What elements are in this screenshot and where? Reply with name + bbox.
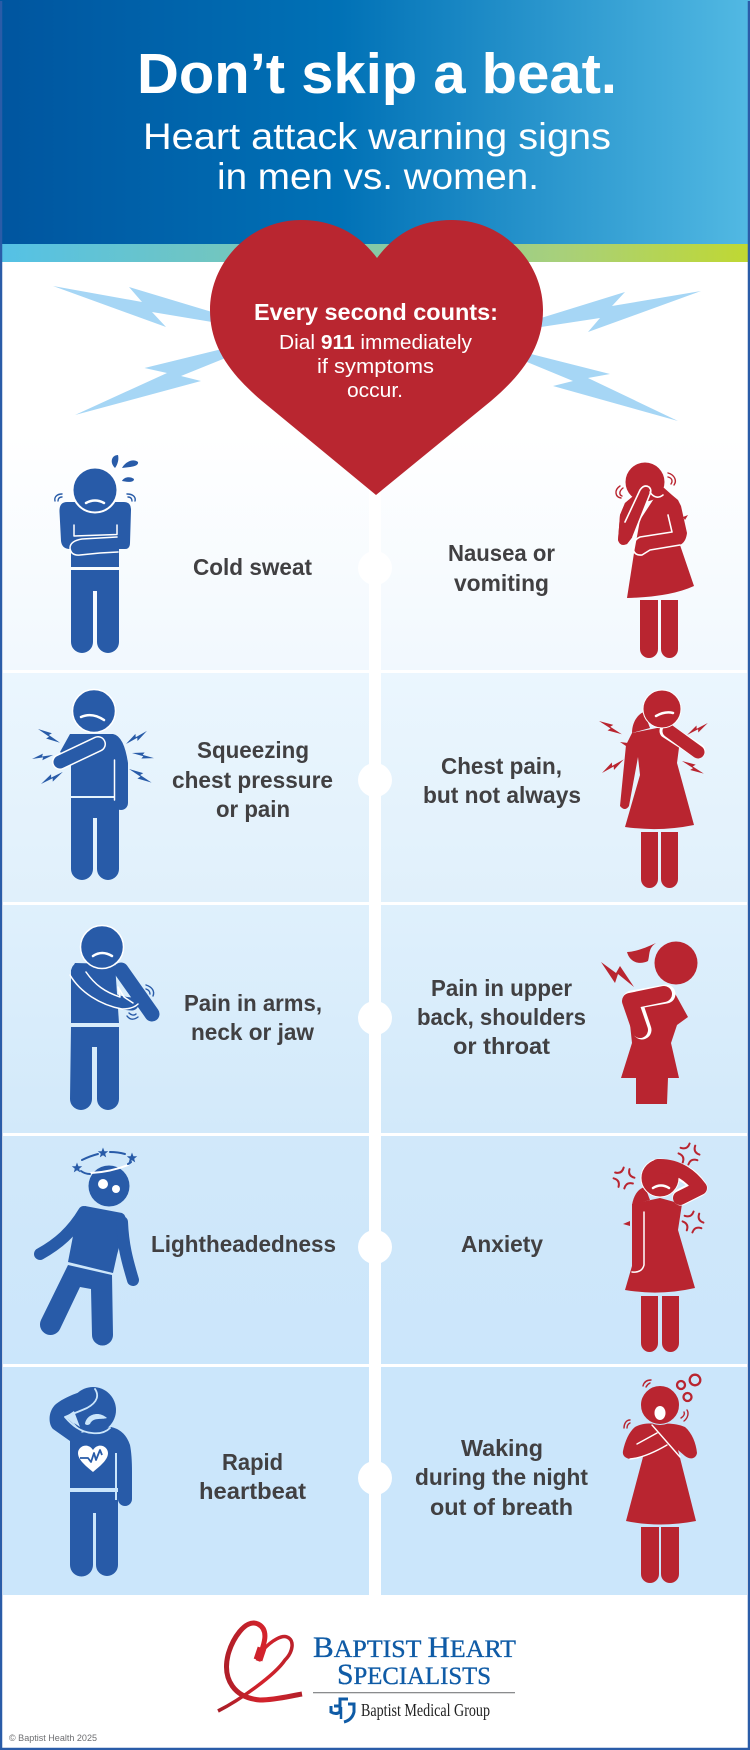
- label: cold sweat: Cold sweat: [193, 554, 312, 580]
- label: anxiety: Anxiety: [461, 1231, 543, 1257]
- label: nausea or vomiting: Nausea or: [448, 540, 555, 566]
- logo cross icon: [331, 1699, 354, 1722]
- logo wordmark: [313, 1631, 516, 1691]
- label: waking out of breath: Waking: [461, 1435, 543, 1461]
- label: upper back: or throat: [453, 1033, 550, 1059]
- label: squeezing chest pressure: or pain: [216, 796, 290, 822]
- label: waking out of breath: [415, 1435, 588, 1520]
- logo wordmark: BAPTIST HEART: [313, 1631, 516, 1664]
- callout text: Every second counts:: [254, 299, 498, 325]
- label: squeezing chest pressure: chest pressure: [172, 767, 333, 793]
- icon: man arm pain: [70, 926, 154, 1110]
- row 4: lightheadedness vs anxiety: [3, 1136, 747, 1364]
- label: pain in arms: [184, 990, 322, 1045]
- label: nausea or vomiting: vomiting: [454, 570, 549, 596]
- row 1: cold sweat vs nausea: [3, 262, 747, 670]
- label: squeezing chest pressure: Squeezing: [197, 737, 309, 763]
- icon: woman nausea: [616, 462, 694, 658]
- label: upper back: back, shoulders: [417, 1004, 586, 1030]
- row 5: rapid heartbeat vs waking: [3, 1367, 747, 1595]
- logo: Baptist Heart Specialists: [218, 1623, 516, 1722]
- label: lightheadedness: Lightheadedness: [151, 1231, 336, 1257]
- icon: woman anxiety: [612, 1141, 706, 1352]
- icon: man lightheaded: [40, 1148, 137, 1346]
- label: rapid heartbeat: heartbeat: [199, 1478, 306, 1504]
- heart callout: [210, 220, 543, 495]
- label: chest pain: Chest pain,: [441, 753, 562, 779]
- label: upper back: [417, 975, 586, 1059]
- label: pain in arms: Pain in arms,: [184, 990, 322, 1016]
- callout text: occur.: [347, 380, 403, 402]
- callout text: [254, 299, 498, 402]
- header banner: [0, 0, 750, 244]
- label: nausea or vomiting: [448, 540, 555, 596]
- label: rapid heartbeat: Rapid: [222, 1449, 283, 1475]
- label: upper back: Pain in upper: [431, 975, 572, 1001]
- subtitle: [143, 116, 611, 197]
- label: waking out of breath: out of breath: [430, 1494, 573, 1520]
- lightning bolts around heart: [53, 286, 701, 421]
- title: Don’t skip a beat.: [137, 42, 617, 106]
- timeline notches: [358, 551, 392, 1495]
- label: chest pain: [423, 753, 581, 808]
- logo wordmark: SPECIALISTS: [337, 1658, 491, 1691]
- subtitle: in men vs. women.: [217, 156, 539, 197]
- row 2: chest pressure vs chest pain: [3, 673, 747, 902]
- gradient strip: [0, 244, 750, 262]
- row 3: arms neck jaw vs upper back: [3, 905, 747, 1133]
- label: pain in arms: neck or jaw: [191, 1019, 314, 1045]
- copyright: © Baptist Health 2025: [9, 1733, 97, 1744]
- icon: woman chest pain: [597, 690, 710, 888]
- icon: woman upper back pain: [601, 942, 698, 1104]
- logo ribbon heart: [218, 1623, 302, 1711]
- icon: man chest pressure: [31, 690, 155, 880]
- label: rapid heartbeat: [199, 1449, 306, 1504]
- callout text: if symptoms: [317, 356, 434, 378]
- label: waking out of breath: during the night: [415, 1464, 588, 1490]
- icon: man rapid heartbeat: [50, 1387, 132, 1576]
- label: squeezing chest pressure: [172, 737, 333, 822]
- label: chest pain: but not always: [423, 782, 581, 808]
- logo subbrand: Baptist Medical Group: [361, 1700, 490, 1720]
- subtitle: Heart attack warning signs: [143, 116, 611, 157]
- icon: woman waking breathless: [623, 1375, 700, 1583]
- callout text: Dial 911 immediately: [279, 332, 472, 354]
- icon: man cold sweat: [55, 455, 138, 653]
